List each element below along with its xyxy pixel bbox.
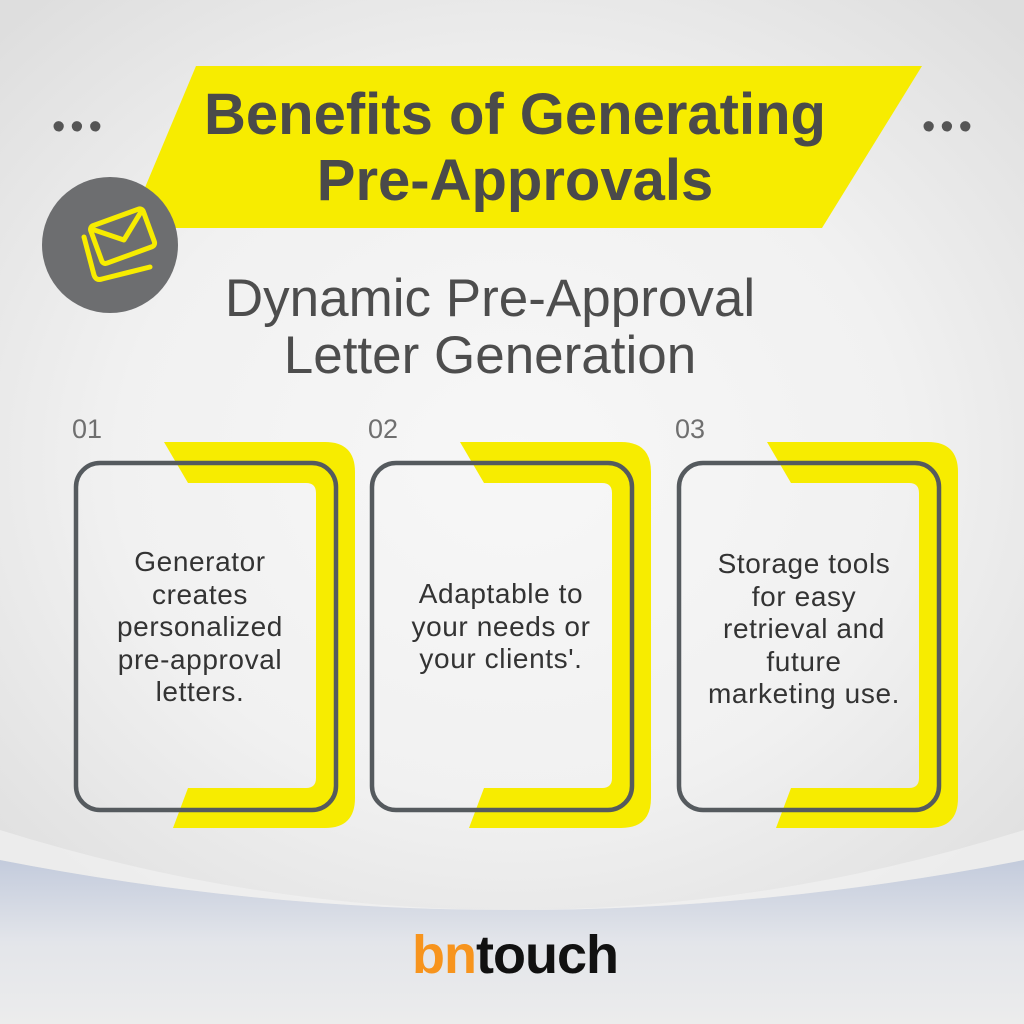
card 1: letters. (156, 676, 244, 707)
subtitle: Letter Generation (284, 326, 696, 385)
icon: envelope circle (42, 177, 178, 313)
subtitle: Dynamic Pre-Approval (225, 269, 755, 328)
dots left: ••• (52, 106, 107, 148)
card 1: Generator (134, 546, 266, 577)
card 1: pre-approval (118, 644, 282, 674)
card 1: personalized (117, 611, 283, 642)
card 2 (370, 442, 651, 828)
card 3: Storage tools (718, 548, 890, 579)
card 2: your clients'. (419, 643, 583, 674)
card 1: creates (152, 578, 248, 610)
number 03: 03 (675, 414, 705, 444)
card 3: for easy (752, 580, 856, 612)
title banner (145, 66, 922, 228)
title text: Benefits of Generating (204, 82, 826, 147)
card 3: marketing use. (708, 678, 900, 709)
number 02: 02 (368, 414, 398, 444)
card 3: retrieval and (723, 613, 885, 644)
number 01: 01 (72, 414, 102, 444)
card 2: your needs or (411, 610, 590, 642)
card 1 (74, 442, 355, 828)
title text: Pre-Approvals (317, 148, 713, 213)
logo: bntouch (412, 925, 618, 985)
subtitle (225, 269, 755, 385)
card 3: future (766, 646, 842, 676)
card 2: Adaptable to (419, 578, 583, 609)
dots right: ••• (922, 106, 977, 148)
card 3 (676, 442, 958, 828)
title text (204, 82, 826, 213)
